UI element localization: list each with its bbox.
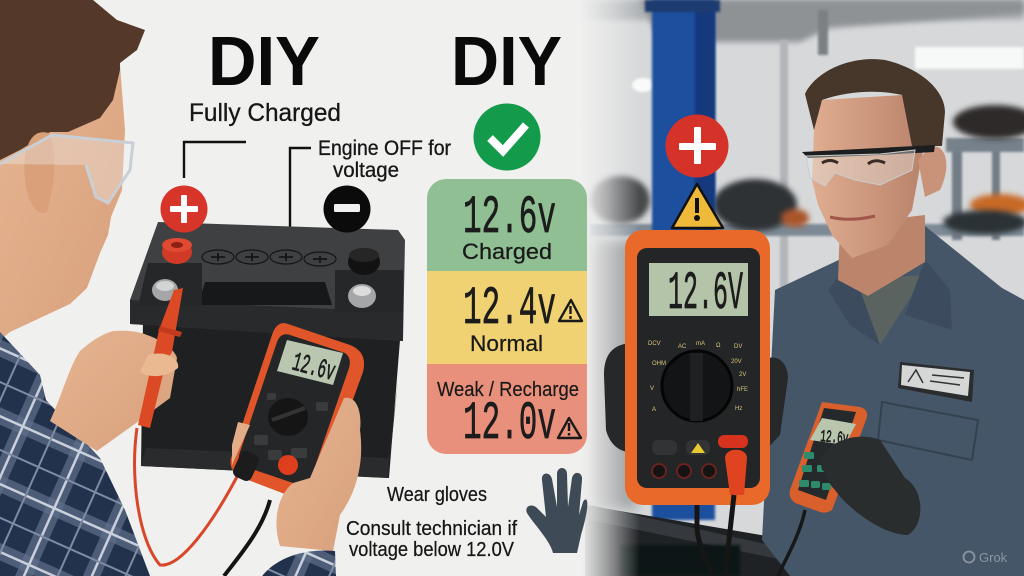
handle recess xyxy=(198,282,332,305)
band: normal xyxy=(427,271,587,364)
watermark: Grok: Grok xyxy=(979,550,1008,565)
right hand holding meter xyxy=(276,398,361,551)
scale labels: Hz xyxy=(735,406,742,412)
shelves and blurred parts xyxy=(590,105,1024,510)
red probe plug xyxy=(725,450,747,495)
label: Weak / Recharge: Weak / Recharge xyxy=(437,379,579,401)
screen xyxy=(277,340,343,385)
ear xyxy=(918,147,946,197)
screen xyxy=(810,418,856,445)
band: charged xyxy=(427,179,587,271)
label: Consult technician: voltage below 12.0V xyxy=(349,539,515,561)
face and neck xyxy=(0,60,125,340)
left man: head with hair and glasses xyxy=(0,0,145,340)
blue lift pillar xyxy=(645,0,720,520)
arrow: down to battery top xyxy=(280,148,311,243)
dial xyxy=(268,398,308,436)
scale labels xyxy=(648,341,748,413)
right technician xyxy=(762,59,1024,576)
icon: plus badge right xyxy=(666,114,728,178)
uniform jacket xyxy=(762,226,1024,576)
scale labels: hFE xyxy=(737,387,748,393)
small meter cable xyxy=(778,510,805,576)
neck xyxy=(838,215,925,296)
screen reading: 12.6v xyxy=(289,349,338,389)
chest pocket xyxy=(878,402,978,460)
reading: 12.4v: 12.4v xyxy=(463,279,556,340)
screen xyxy=(649,263,748,316)
black terminal xyxy=(348,249,380,275)
icon: warning 12.0v xyxy=(558,418,581,438)
icon: warning triangle xyxy=(672,184,723,228)
scale labels: mA xyxy=(696,341,705,347)
scale labels: DCV xyxy=(648,341,661,347)
eyes and mouth xyxy=(822,160,885,164)
red probe xyxy=(138,288,183,428)
small multimeter in DIY hand xyxy=(230,323,364,501)
label: Engine OFF for voltage: Engine OFF for xyxy=(318,137,451,160)
cables xyxy=(697,495,734,576)
cuff xyxy=(262,551,336,576)
buttons xyxy=(254,393,328,460)
battery body xyxy=(141,320,400,478)
reading: 12.0v: 12.0v xyxy=(463,394,556,455)
dial xyxy=(662,351,732,421)
name patch xyxy=(898,362,974,402)
battery xyxy=(130,222,405,478)
green buttons xyxy=(799,452,831,490)
icon: warning 12.4v xyxy=(559,300,582,321)
reading: 12.6v xyxy=(819,428,849,449)
large multimeter xyxy=(604,230,788,576)
body xyxy=(625,230,770,505)
panel: blurred garage background xyxy=(560,0,1024,576)
red lead wire xyxy=(135,428,240,565)
vent caps xyxy=(202,250,336,266)
buttons xyxy=(652,440,677,455)
face xyxy=(812,95,925,258)
panel: voltage status card xyxy=(427,179,587,455)
icon: minus badge xyxy=(324,186,370,232)
black gloved fingers xyxy=(604,343,788,452)
scale labels: Ω xyxy=(716,343,721,349)
undershirt xyxy=(845,275,925,345)
ear xyxy=(24,132,55,213)
white fade between panels xyxy=(530,0,640,576)
title: DIY right: DIY xyxy=(451,22,562,100)
glasses xyxy=(802,145,935,186)
large multimeter: 12.6V xyxy=(668,264,743,325)
small multimeter with technician xyxy=(790,402,867,513)
hair xyxy=(805,59,945,146)
icon: plus badge left xyxy=(160,186,208,232)
watermark: Grok xyxy=(964,550,1008,565)
arrow: leader to plus terminal xyxy=(184,142,246,178)
icon: glove xyxy=(526,468,587,553)
scale labels: 20V xyxy=(731,359,742,365)
band: weak xyxy=(427,364,587,454)
battery top lid xyxy=(130,222,405,341)
scale labels: A xyxy=(652,407,656,413)
scale labels: OHM xyxy=(652,361,666,367)
fingers behind meter xyxy=(232,422,250,465)
metal posts xyxy=(152,279,178,301)
label: Normal: Normal xyxy=(470,331,543,356)
scale labels: V xyxy=(650,386,654,392)
left man: plaid shirt xyxy=(0,332,150,576)
collar xyxy=(828,260,952,345)
hair xyxy=(0,0,145,160)
technician gloved hand xyxy=(820,437,920,535)
reading: 12.6v: 12.6v xyxy=(463,188,556,249)
left hand holding probe xyxy=(50,288,183,451)
engine bay foreground xyxy=(585,505,1024,576)
label: Wear gloves: Wear gloves xyxy=(387,484,487,506)
title: DIY left: DIY xyxy=(208,22,320,100)
red terminal xyxy=(162,240,192,264)
label: Engine OFF for voltage: voltage xyxy=(333,159,399,182)
scale labels: AC xyxy=(678,344,687,350)
label: Fully Charged: Fully Charged xyxy=(189,99,341,127)
input jacks xyxy=(652,464,716,478)
label: Consult technician xyxy=(346,518,517,561)
safety glasses xyxy=(0,135,133,203)
black lead wire xyxy=(224,500,270,576)
scale labels: 2V xyxy=(739,372,746,378)
label: Charged: Charged xyxy=(462,239,552,264)
label: Engine OFF for voltage xyxy=(318,137,451,182)
scale labels: DV xyxy=(734,344,742,350)
label: Consult technician: Consult technician if xyxy=(346,518,517,540)
icon: green check xyxy=(474,104,540,170)
